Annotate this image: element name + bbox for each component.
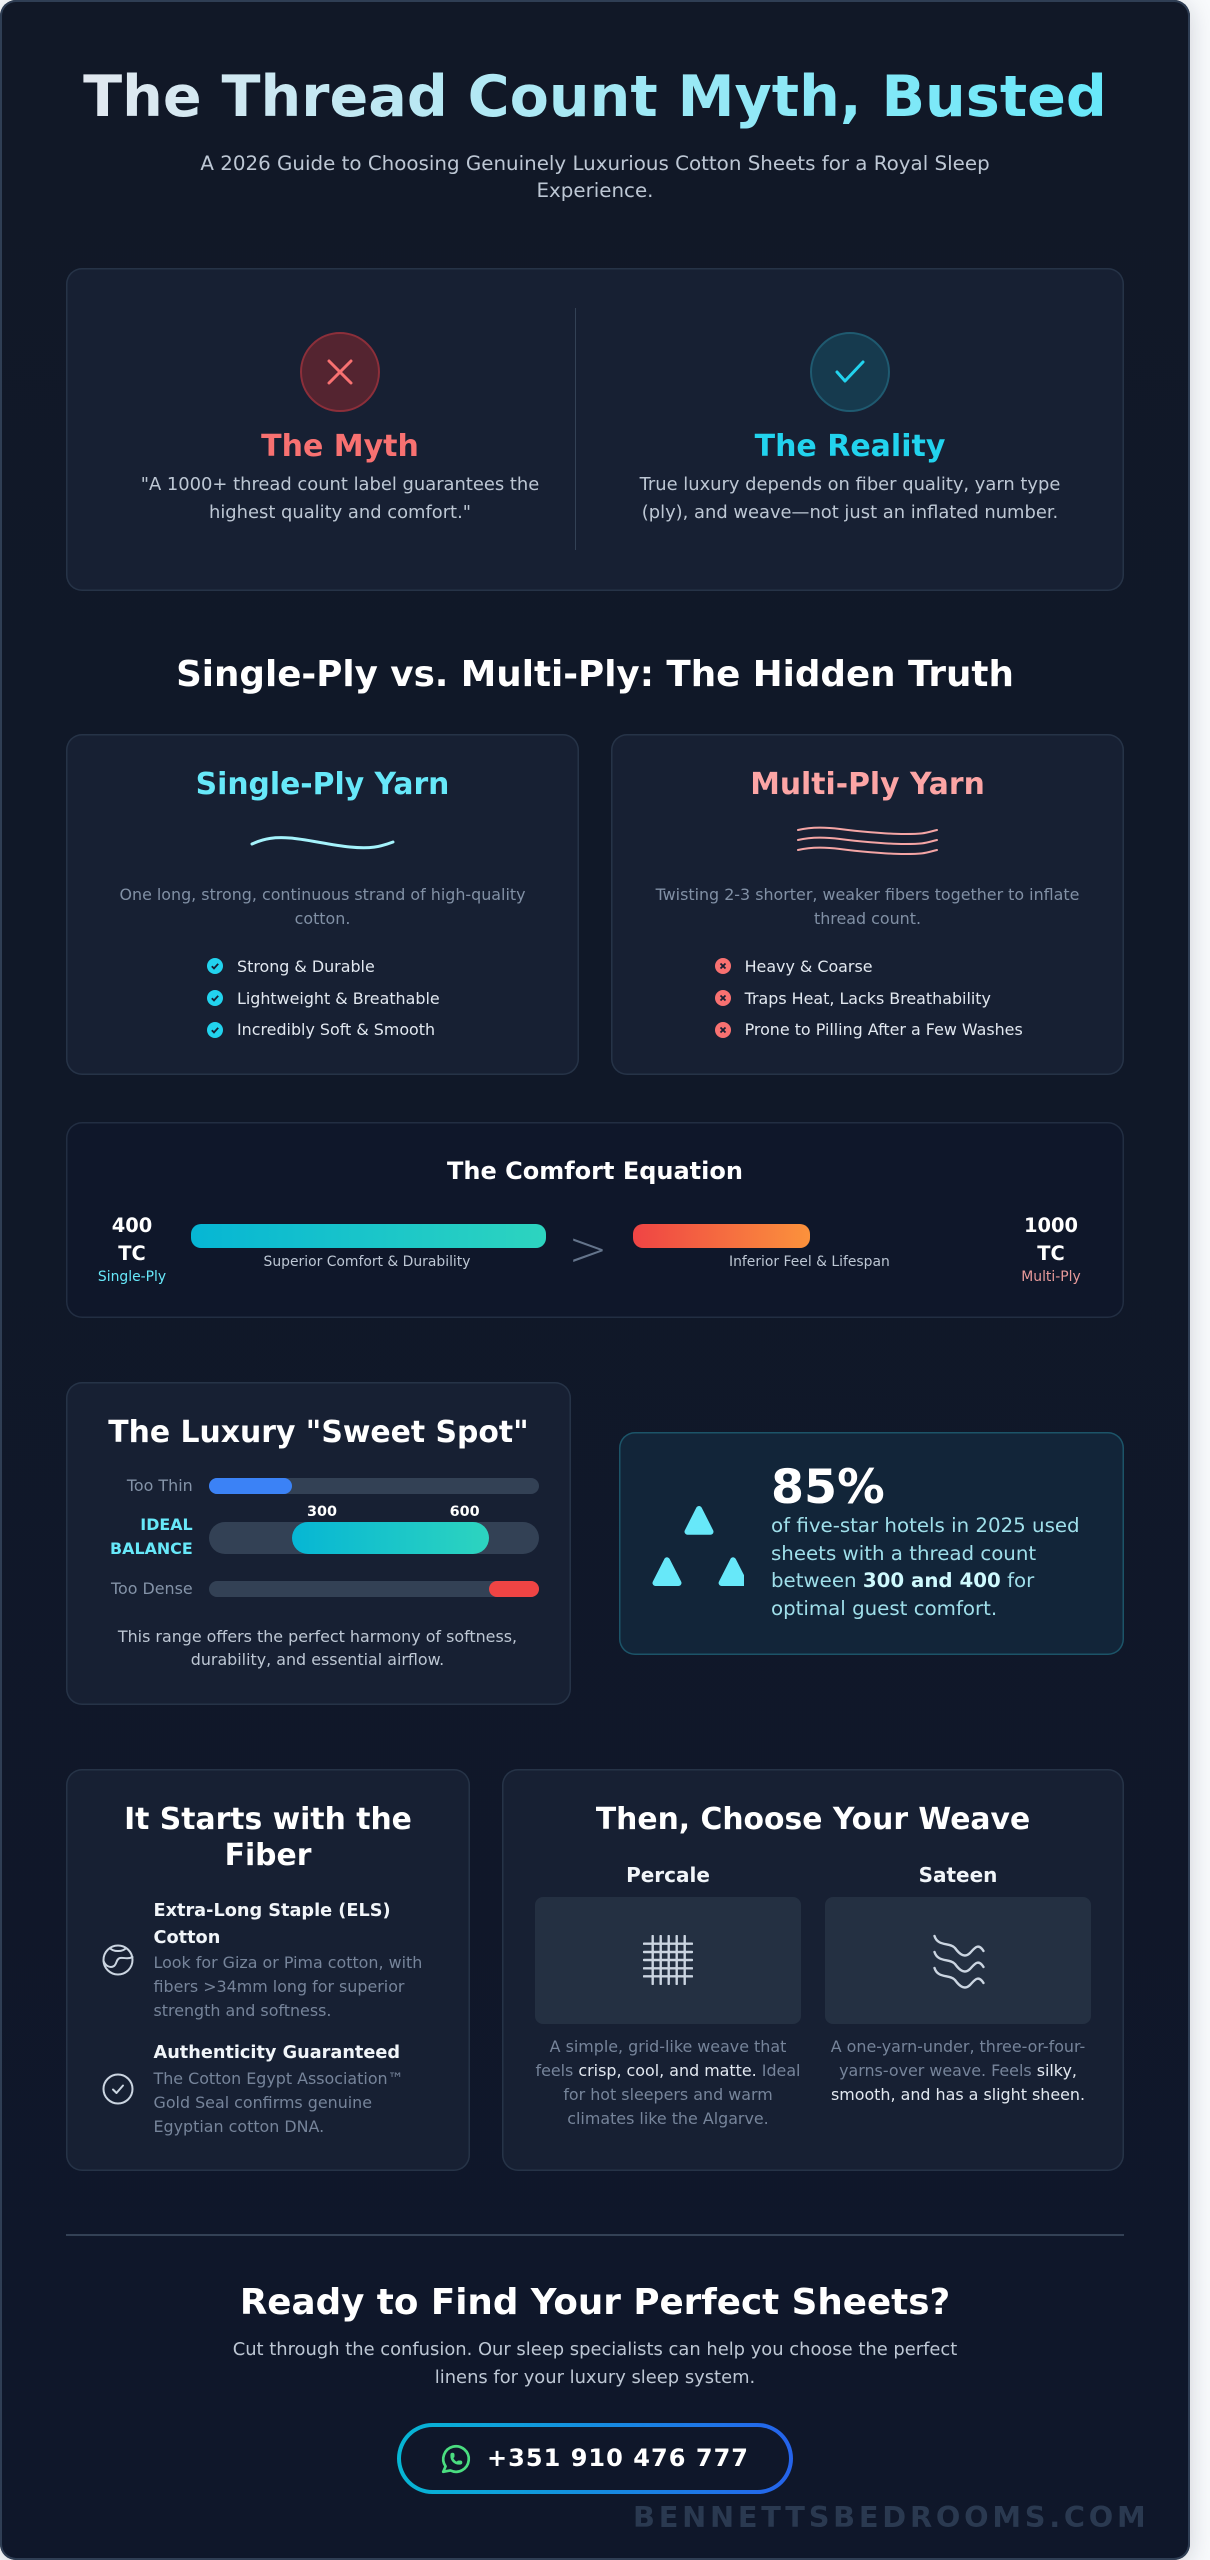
text: prone to pilling: Prone to Pilling After a Few Washes	[745, 1020, 1023, 1039]
heading: the reality: The Reality	[755, 428, 945, 464]
panel: fiber	[66, 1769, 470, 2171]
heading: single-ply: Single-Ply Yarn	[196, 767, 449, 802]
subtitle: Experience.	[536, 179, 653, 202]
icon: reality check	[810, 332, 890, 412]
panel: comfort equation	[66, 1122, 1124, 1318]
label: 1000 TC: 1000	[1024, 1214, 1078, 1236]
text: myth description	[141, 474, 539, 522]
text: percale description: feels crisp, cool, and matte. Ideal	[536, 2061, 800, 2080]
text: authenticity heading: Authenticity Guaranteed	[154, 2043, 400, 2063]
text: single-ply description: cotton.	[295, 909, 350, 928]
label: inferior feel: Inferior Feel & Lifespan	[729, 1254, 890, 1270]
heading: fiber: It Starts with the	[124, 1802, 412, 1837]
label: too dense: Too Dense	[111, 1579, 193, 1598]
text: single-ply description: One long, strong, continuous strand of high-quality	[119, 885, 526, 904]
bar: 1000 TC comfort	[633, 1224, 810, 1248]
text: percale description	[536, 2037, 800, 2128]
panel: myth vs reality	[66, 268, 1124, 591]
label: sateen: Sateen	[919, 1863, 997, 1887]
label: 400 TC: TC	[118, 1242, 146, 1264]
label: 1000 TC	[1024, 1214, 1078, 1264]
icon: myth cross	[300, 332, 380, 412]
text: phone number: +351 910 476 777	[487, 2444, 749, 2472]
stat: 85%: 85%	[771, 1460, 885, 1515]
heading: fiber: Fiber	[225, 1838, 311, 1873]
text: authenticity description: Egyptian cotton DNA.	[154, 2117, 324, 2136]
heading: weave: Then, Choose Your Weave	[596, 1802, 1030, 1837]
text: call to action description: Cut through the confusion. Our sleep specialists can help you choose the perfect	[233, 2339, 957, 2360]
text: lightweight and breathable: Lightweight & Breathable	[237, 988, 440, 1008]
text: extra-long staple description: fibers >34mm long for superior	[154, 1977, 404, 1996]
panel: luxury sweet spot	[66, 1382, 571, 1705]
symbol: greater than: >	[568, 1222, 608, 1277]
text: authenticity description: Gold Seal confirms genuine	[154, 2093, 372, 2112]
text: percale description: climates like the Algarve.	[567, 2109, 769, 2128]
icon: check	[207, 990, 223, 1006]
icon: sateen waves	[933, 1934, 985, 1989]
text: multi-ply description: thread count.	[814, 909, 921, 928]
icon: cotton globe	[102, 1944, 134, 1976]
text: extra-long staple description: strength and softness.	[154, 2001, 331, 2020]
text: extra-long staple heading	[154, 1901, 391, 1948]
text: heavy and coarse: Heavy & Coarse	[745, 956, 873, 976]
icon: cross	[715, 958, 731, 974]
text: extra-long staple heading: Extra-Long Staple (ELS)	[154, 1901, 391, 1921]
heading: sweet spot: The Luxury "Sweet Spot"	[108, 1415, 529, 1450]
text: stat description: of five-star hotels in 2025 used	[771, 1514, 1080, 1537]
label: percale: Percale	[626, 1863, 710, 1887]
icon: single strand	[250, 836, 394, 850]
label: 400 TC: 400	[112, 1214, 152, 1236]
swatch: sateen	[825, 1897, 1091, 2024]
subtitle	[200, 152, 990, 202]
heading: call to action: Ready to Find Your Perfect Sheets?	[240, 2282, 950, 2323]
heading: single-ply vs multi-ply: Single-Ply vs. Multi-Ply: The Hidden Truth	[176, 654, 1014, 695]
label: 400 TC	[112, 1214, 152, 1264]
text: reality description: (ply), and weave—not just an inflated number.	[642, 502, 1058, 522]
label: ideal balance: BALANCE	[110, 1539, 193, 1558]
text: authenticity description: The Cotton Egypt Association™	[154, 2069, 404, 2088]
text: stat description: sheets with a thread count	[771, 1542, 1036, 1565]
icon: check	[207, 958, 223, 974]
label: 1000 TC: TC	[1037, 1242, 1065, 1264]
text: percale description: A simple, grid-like weave that	[550, 2037, 786, 2056]
text: incredibly soft and smooth: Incredibly Soft & Smooth	[237, 1020, 435, 1039]
text: stat description: optimal guest comfort.	[771, 1597, 997, 1620]
list: single-ply benefits	[207, 956, 440, 1039]
icon: cross	[715, 990, 731, 1006]
text: stat description: between 300 and 400 for	[771, 1569, 1034, 1592]
text: stat description	[771, 1514, 1080, 1620]
text: reality description	[640, 474, 1060, 522]
text: myth description: highest quality and comfort."	[209, 502, 471, 522]
text: sateen description: yarns-over weave. Feels silky,	[839, 2061, 1077, 2080]
label: ideal balance	[110, 1515, 193, 1558]
label: 300: 300	[307, 1504, 337, 1520]
panel: weave	[502, 1769, 1124, 2171]
text: range description: This range offers the perfect harmony of softness,	[118, 1626, 517, 1646]
text: call to action description	[233, 2339, 957, 2388]
label: ideal balance: IDEAL	[140, 1515, 193, 1534]
chart: thread count range bars	[110, 1476, 539, 1598]
icon: whatsapp	[442, 2444, 470, 2474]
watermark: website: BENNETTSBEDROOMS.COM	[633, 2500, 1149, 2534]
heading: fiber	[124, 1802, 412, 1873]
text: multi-ply description	[656, 885, 1079, 928]
text: sateen description: A one-yarn-under, three-or-four-	[831, 2037, 1085, 2056]
swatch: percale	[535, 1897, 801, 2024]
heading: the myth: The Myth	[261, 428, 419, 464]
text: single-ply description	[119, 885, 526, 928]
text: extra-long staple description	[154, 1953, 422, 2020]
bar: ideal balance	[209, 1522, 539, 1554]
text: call to action description: linens for your luxury sleep system.	[435, 2366, 755, 2388]
text: sateen description	[831, 2037, 1085, 2104]
bar: too thin	[209, 1478, 539, 1494]
text: range description: durability, and essential airflow.	[191, 1650, 444, 1669]
bar: too dense	[209, 1581, 539, 1597]
panel: multi-ply yarn	[611, 734, 1124, 1075]
label: multi-ply: Multi-Ply	[1021, 1269, 1081, 1285]
text: extra-long staple description: Look for Giza or Pima cotton, with	[154, 1953, 422, 1972]
panel: single-ply yarn	[66, 734, 579, 1075]
icon: seal check	[102, 2074, 134, 2104]
label: single-ply: Single-Ply	[98, 1269, 166, 1285]
label: too thin: Too Thin	[127, 1476, 193, 1495]
icon: cross	[715, 1022, 731, 1038]
list: multi-ply drawbacks	[715, 956, 1023, 1039]
text: authenticity description	[153, 2069, 404, 2136]
text: multi-ply description: Twisting 2-3 shorter, weaker fibers together to inflate	[656, 885, 1079, 904]
text: myth description: "A 1000+ thread count label guarantees the	[141, 474, 539, 495]
subtitle: A 2026 Guide to Choosing Genuinely Luxurious Cotton Sheets for a Royal Sleep	[200, 152, 990, 174]
label: 600: 600	[450, 1504, 480, 1520]
text: percale description: for hot sleepers and warm	[563, 2085, 773, 2104]
text: extra-long staple heading: Cotton	[154, 1928, 220, 1948]
button: phone number	[397, 2423, 793, 2494]
text: reality description: True luxury depends on fiber quality, yarn type	[640, 474, 1060, 495]
heading: comfort equation: The Comfort Equation	[447, 1157, 743, 1185]
title: The Thread Count Myth, Busted	[83, 64, 1107, 130]
text: sateen description: smooth, and has a slight sheen.	[831, 2085, 1085, 2104]
heading: multi-ply: Multi-Ply Yarn	[750, 767, 985, 802]
bar: 400 TC comfort	[191, 1224, 546, 1248]
icon: triangles	[652, 1506, 744, 1586]
text: range description	[118, 1626, 517, 1669]
text: strong and durable: Strong & Durable	[237, 956, 375, 976]
text: traps heat: Traps Heat, Lacks Breathability	[745, 988, 991, 1008]
label: superior comfort: Superior Comfort & Durability	[264, 1254, 470, 1270]
icon: twisted strands	[797, 826, 938, 855]
icon: percale grid	[643, 1935, 693, 1985]
icon: check	[207, 1022, 223, 1038]
panel: 85 percent stat	[619, 1432, 1124, 1655]
